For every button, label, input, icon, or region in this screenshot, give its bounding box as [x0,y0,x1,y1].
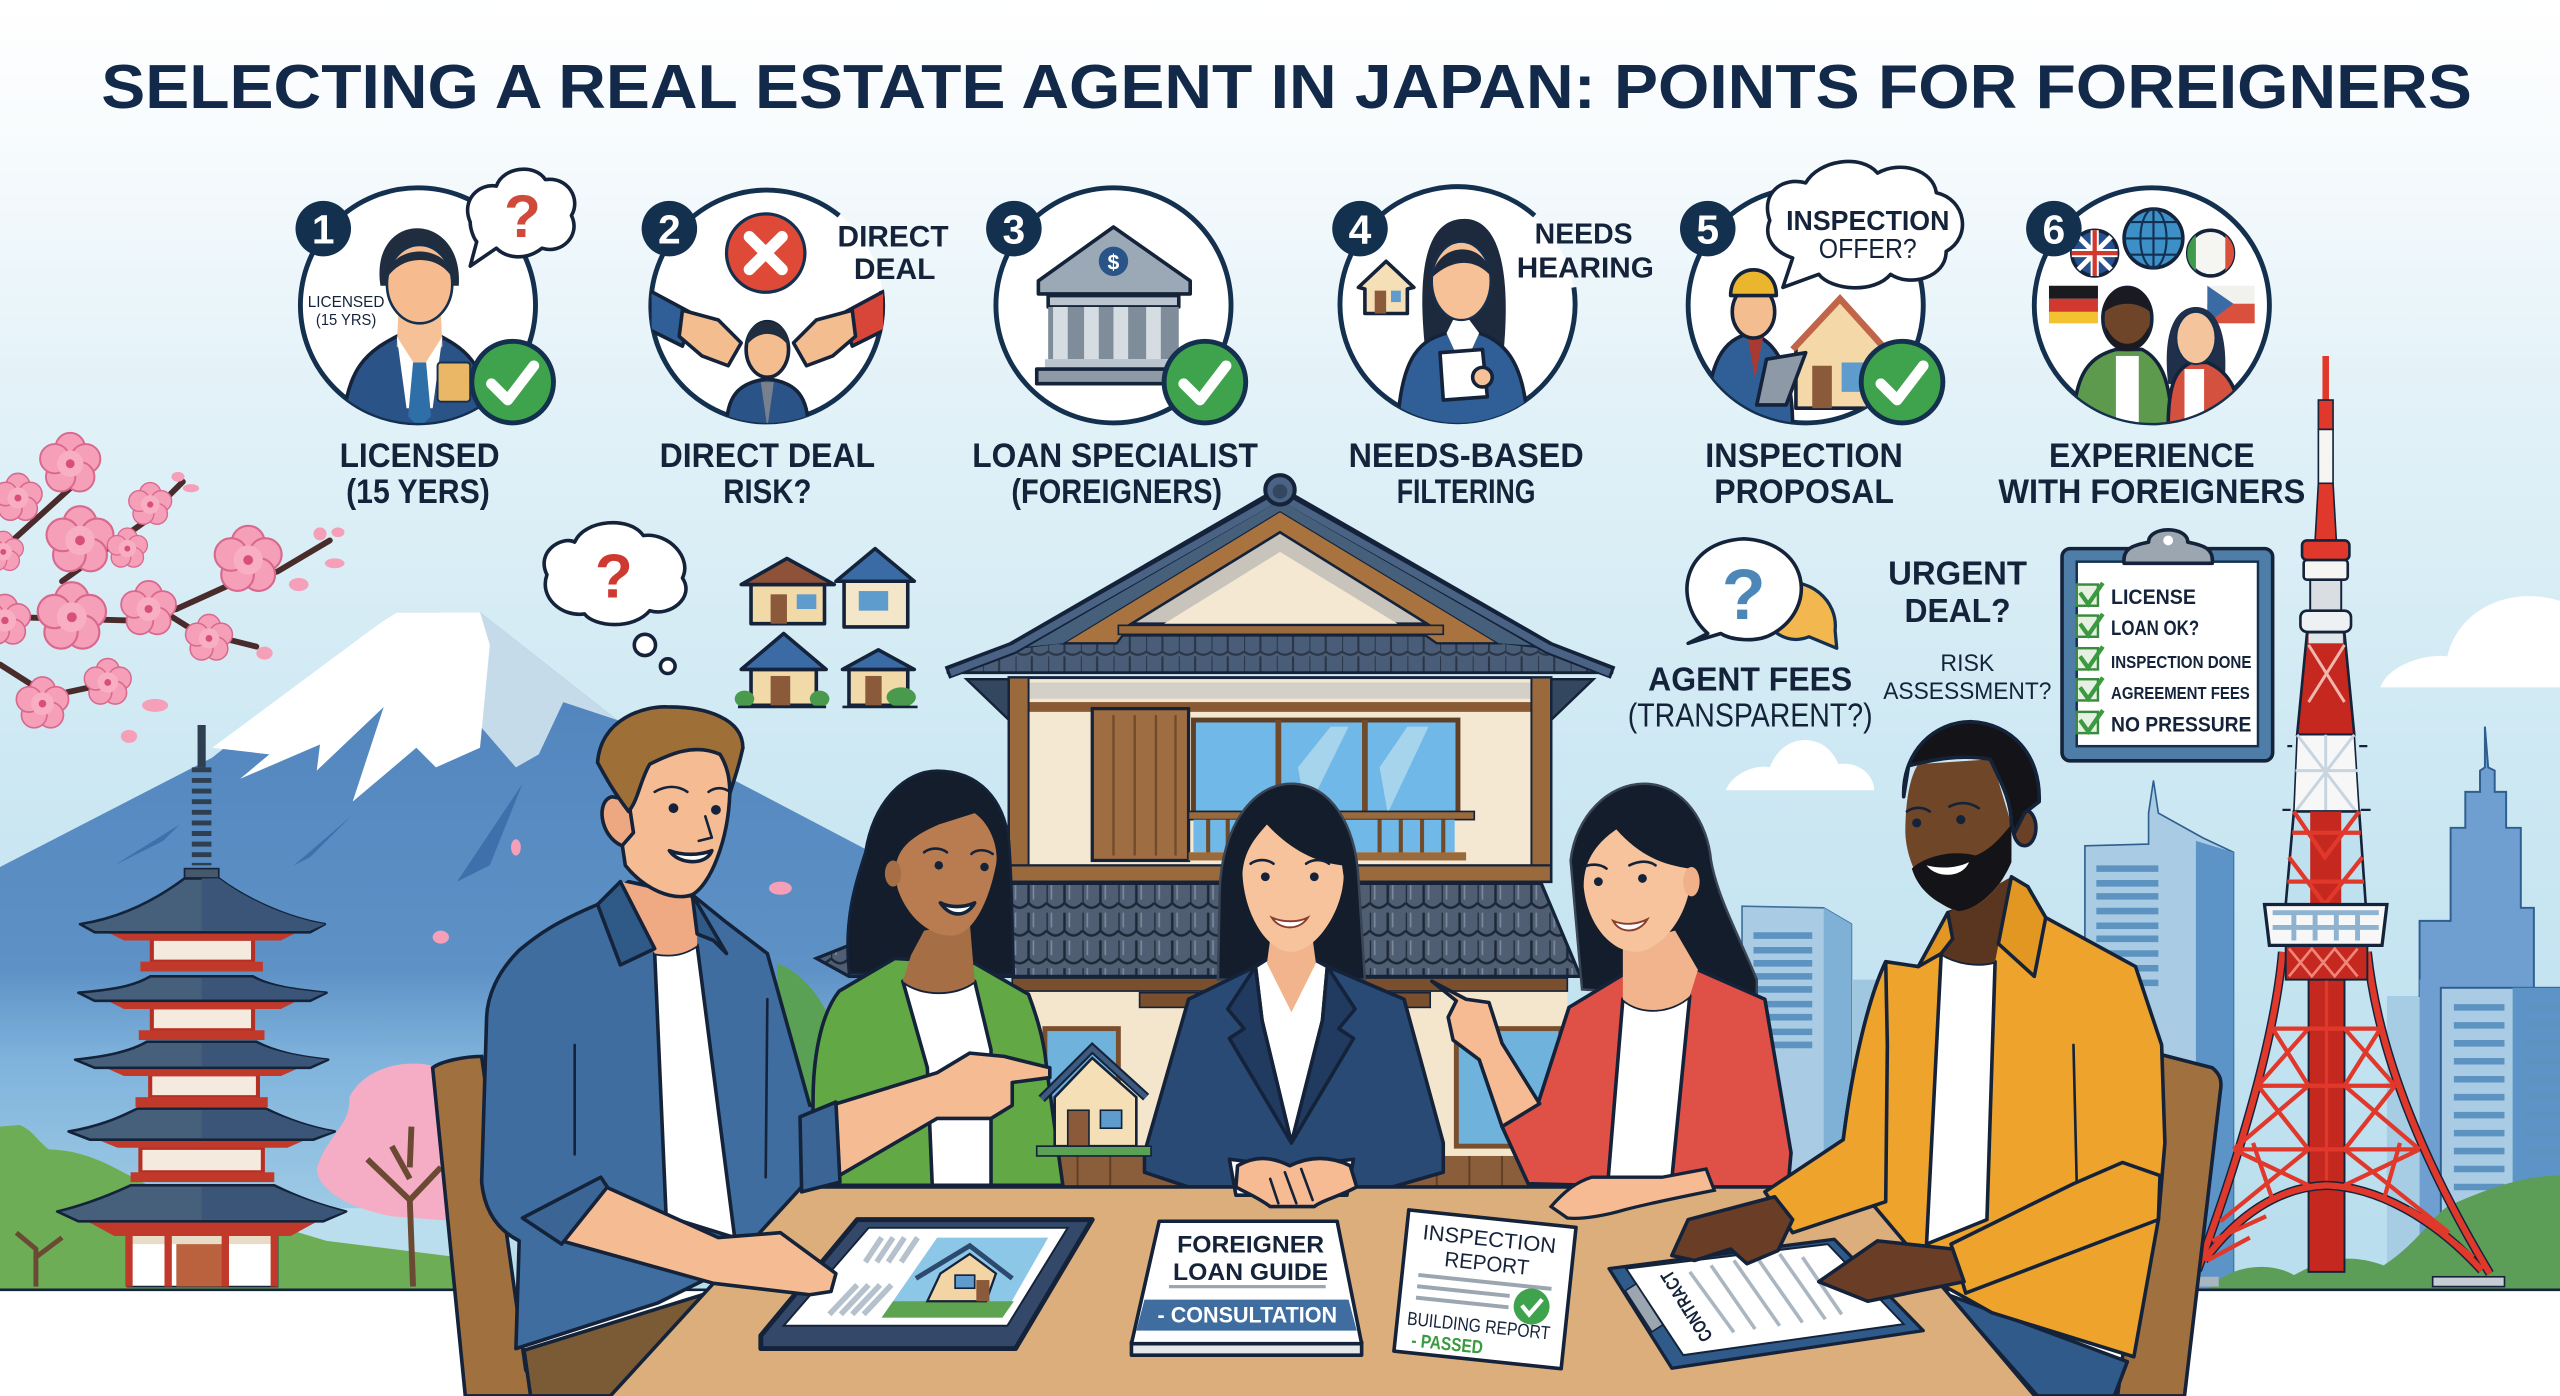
icon: question cloud: ? [504,182,541,250]
inspection report [1394,1210,1576,1369]
number badge 5: 5 [1696,206,1719,252]
label: direct deal risk [660,437,875,511]
icon: bank [1037,227,1190,384]
icon: flag Czech [2207,286,2255,323]
thought bubble with question mark: ? [595,543,633,612]
Tokyo Tower [2198,356,2504,1287]
icon: green check [1861,341,1943,423]
cherry blossom branch [0,433,792,944]
icon: flag Italy [2187,230,2234,276]
person: man in orange jacket [1843,722,2165,1396]
text: licensed 15 yrs small: (15 YRS) [316,312,376,329]
cherry tree [16,1064,457,1287]
icon: flag Germany [2049,286,2098,323]
arm: man in orange jacket [1672,962,2160,1301]
callout: inspection offer: INSPECTION [1786,205,1949,236]
text: risk assessment: ASSESSMENT? [1883,679,2051,705]
text: direct deal small [838,221,949,286]
panel: point 5 inspection proposal [1680,162,1962,511]
number badge 6 [2026,201,2082,256]
contract clipboard [1609,1239,1923,1368]
icon: diverse couple [2073,287,2240,428]
text: needs hearing small: HEARING [1517,253,1654,285]
text: agent fees: AGENT FEES [1648,662,1852,699]
clipboard checklist: LICENSE [2111,586,2196,609]
clipboard checklist [2062,530,2273,761]
text: licensed 15 yrs small: LICENSED [308,294,384,311]
number badge 2 [642,201,697,256]
foreigner loan guide booklet [1131,1221,1362,1355]
text: risk assessment: RISK [1940,651,1994,677]
icon: chat bubbles agent fees: ? [1722,555,1766,635]
label: loan specialist: (FOREIGNERS) [1011,473,1222,511]
text: urgent deal: DEAL? [1904,593,2011,630]
number badge 1: 1 [312,206,335,252]
person: agent woman in navy blazer [1144,784,1443,1197]
sleeve: man pointing cuff [800,1102,840,1192]
icon: chat bubbles agent fees [1687,539,1837,648]
label: loan specialist: LOAN SPECIALIST [972,437,1258,475]
inspection report: INSPECTION [1422,1221,1557,1258]
label: loan specialist [972,437,1258,511]
person: woman in green cardigan [812,771,1063,1185]
icon: inspector and house [1706,270,1886,428]
text: direct deal small: DIRECT [838,221,949,254]
text: licensed 15 yrs small [308,294,384,329]
icon: red cross [727,214,805,292]
arm: man on tablet [562,1185,836,1295]
icon: woman with notepad [1398,219,1528,428]
title: SELECTING A REAL ESTATE AGENT IN JAPAN: POINTS FOR FOREIGNERS [101,53,2472,122]
Mount Fuji [0,612,914,1208]
number badge 5 [1680,201,1736,256]
label: licensed: (15 YERS) [346,473,490,511]
green hills [0,1125,2560,1290]
hand: woman on table [1551,1169,1714,1218]
sleeve: man lower cuff [522,1177,607,1244]
label: inspection proposal [1705,437,1903,511]
label: needs-based filtering [1349,437,1584,511]
ground [0,1290,2560,1396]
label: inspection proposal: INSPECTION [1705,437,1903,475]
icon: hands and person [650,291,885,428]
icon: question cloud [468,169,575,266]
label: experience with foreigners: EXPERIENCE [2049,437,2255,475]
icon: four small houses [735,549,918,707]
foreigner loan guide booklet: FOREIGNER [1177,1232,1324,1258]
text: urgent deal [1888,556,2027,630]
hand: agent clasped hands [1229,1158,1357,1207]
clipboard checklist: NO PRESSURE [2111,713,2251,736]
arm: man pointing [831,1053,1050,1176]
text: urgent deal: URGENT [1888,556,2027,593]
pagoda [57,725,346,1287]
inspection report: BUILDING REPORT [1406,1308,1552,1344]
icon: licensed agent [345,228,478,423]
chair left [433,1056,540,1396]
table [607,1187,2038,1396]
text: risk assessment [1883,651,2051,705]
inspection report: - PASSED [1410,1329,1484,1358]
foreigner loan guide booklet: - CONSULTATION [1158,1302,1337,1327]
label: inspection proposal: PROPOSAL [1714,473,1894,511]
text: agent fees: (TRANSPARENT?) [1628,698,1873,735]
label: experience with foreigners: WITH FOREIGNERS [1998,473,2305,511]
label: direct deal risk: RISK? [723,473,811,511]
icon: bank: $ [1108,251,1120,274]
panel: point 6 experience with foreigners [1998,188,2305,511]
panel: point 3 loan specialist [972,188,1258,511]
label: licensed [340,437,500,511]
text: needs hearing small: NEEDS [1535,218,1633,250]
panel: point 4 needs-based filtering [1332,187,1654,511]
clipboard checklist: AGREEMENT FEES [2111,683,2250,703]
callout: inspection offer: OFFER? [1819,233,1917,264]
text: agent fees [1628,662,1873,735]
thought bubble with question mark [544,523,686,674]
number badge 3: 3 [1003,206,1025,252]
label: direct deal risk: DIRECT DEAL [660,437,875,475]
number badge 1 [296,201,351,256]
text: direct deal small: DEAL [854,253,936,286]
panel: point 1 licensed [296,169,575,511]
icon: globe [2124,209,2183,268]
icon: flag UK [2072,230,2118,276]
contract clipboard: CONTRACT [1656,1266,1717,1346]
label: needs-based filtering: NEEDS-BASED [1349,437,1584,475]
label: licensed: LICENSED [340,437,500,475]
person: woman in red cardigan [1432,784,1791,1190]
skyline buildings [1742,727,2560,1290]
tablet [761,1220,1092,1349]
small house model [1037,1048,1151,1156]
chair right [2118,1055,2221,1396]
Japanese house [777,475,1613,1185]
callout: inspection offer [1767,162,1962,288]
foreigner loan guide booklet: LOAN GUIDE [1173,1260,1328,1286]
label: needs-based filtering: FILTERING [1397,473,1536,511]
label: experience with foreigners [1998,437,2305,511]
icon: small house [1358,261,1414,314]
text: needs hearing small [1517,218,1654,285]
panel: point 2 direct deal [642,189,949,511]
number badge 4: 4 [1349,206,1372,252]
person: man in denim shirt [482,707,839,1396]
clipboard checklist: INSPECTION DONE [2111,652,2251,672]
clouds [1726,596,2560,790]
number badge 3 [986,201,1042,256]
number badge 4 [1332,201,1388,256]
number badge 6: 6 [2043,206,2065,252]
icon: green check [472,341,553,423]
icon: green check [1164,341,1246,423]
number badge 2: 2 [658,206,681,252]
clipboard checklist: LOAN OK? [2111,617,2199,640]
inspection report: REPORT [1443,1248,1530,1280]
